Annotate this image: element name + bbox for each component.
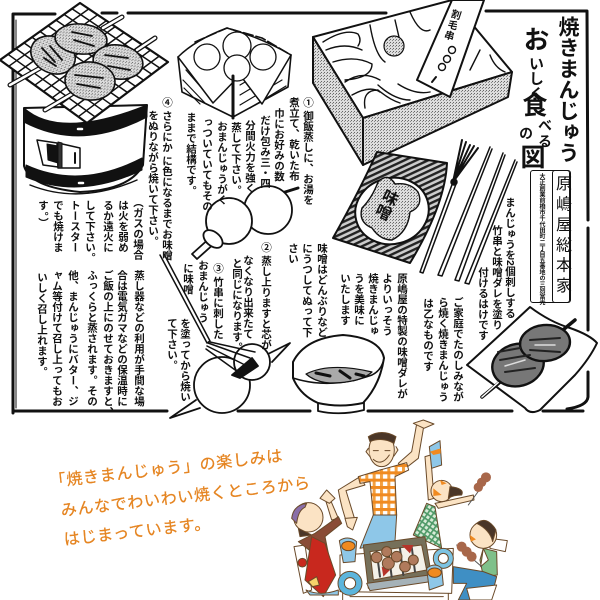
icon: bowl of miso (293, 335, 384, 413)
text: step 1: 巾にお好みの数 (273, 108, 285, 182)
boy on right (453, 520, 507, 600)
title: の (518, 126, 534, 140)
text: special miso sauce: よりいっそう (381, 273, 393, 336)
text: step 1: だけ包み三・四 (259, 115, 271, 188)
text: gas note: でも焼けま (52, 200, 64, 252)
text: gas note: して下さい。 (84, 200, 96, 263)
text: steamer note: 蒸し器などの利用が手間な場 (133, 270, 145, 406)
miso label: 味 (379, 187, 401, 210)
text: skewer and brush: まんじゅうを2個刺しする (504, 197, 516, 318)
text: step 3: て下さい。 (166, 318, 178, 370)
text: steamer note: ふっくらと蒸されます。その (86, 270, 98, 406)
text: special miso sauce: うを美味に (353, 273, 365, 326)
frame border (13, 11, 588, 413)
text: step 3: を塗ってから焼い (179, 318, 191, 402)
icon: box of manju with label (313, 0, 512, 165)
woman on left (292, 490, 342, 597)
icon: miso packet (333, 152, 447, 263)
text: enjoy at home (422, 297, 464, 402)
text: step 3: おまんじゅう (197, 260, 209, 323)
text: step 4: をぬりながら焼いて下さい。 (147, 110, 159, 246)
text: step 3 (166, 260, 224, 402)
text: step 3: に味噌 (182, 263, 194, 294)
text: gas note: トースター (69, 200, 81, 252)
maker stamp: 原嶋屋総本家 (553, 175, 570, 293)
text: special miso sauce: いたします (339, 273, 351, 326)
text: step 1: 分間火力を強く (244, 120, 256, 194)
text: step 1: ① 御飯蒸しに、お湯を (302, 97, 314, 205)
orange message: 「焼きまんじゅう」の楽しみは (49, 448, 284, 491)
text: gas note: す。） (37, 200, 49, 228)
icon: charcoal brazier with grill (0, 3, 168, 194)
text: step 1: ままで結構です。 (185, 112, 197, 196)
text: miso bowl note: 味噌はどんぶりなど (316, 243, 328, 338)
text: enjoy at home: ら焼く焼きまんじゅう (437, 297, 449, 402)
icon: three-ball dango on skewer (192, 186, 298, 259)
title: べる (537, 118, 553, 148)
text: skewer and brush (477, 197, 516, 340)
text: step 4: ④ さらにか に色になるまでお味噌 (161, 97, 173, 260)
orange message: はじまっています。 (63, 516, 212, 549)
text: enjoy at home: ご家庭でたのしみなが (452, 297, 464, 402)
text: step 2 (231, 242, 272, 352)
text: gas note (37, 197, 144, 263)
icon: bamboo skewers and brush (420, 140, 517, 284)
text: step 3: ③ 竹串に刺した (212, 263, 224, 339)
table and grill (338, 537, 453, 600)
maker stamp: 大正創業前橋市千代田町二丁目五番地の三別當光 (538, 173, 544, 305)
text: step 1: 煮立て、乾いた布 (288, 97, 300, 181)
text: steamer note: 合は電気ガマなどの保温時に (116, 270, 128, 406)
title: いしく (527, 56, 544, 101)
orange message: みんなでわいわい焼くところから (60, 475, 312, 520)
icon: plate with grilled skewer (467, 307, 597, 412)
text: special miso sauce: 焼きまんじゅ (367, 273, 379, 336)
text: steamer note: いしく召し上れます。 (36, 272, 48, 377)
text: gas note: るか遠火に (102, 200, 114, 252)
miso label: 噌 (372, 201, 394, 225)
text: gas note: （ガスの場合 (132, 197, 144, 260)
text: step 1: っついていてもその (201, 117, 213, 212)
text: miso bowl note (287, 243, 328, 338)
text: steamer note: ご飯の上にのせておきますと、 (102, 270, 114, 417)
text: step 2: と同じになります。 (231, 258, 243, 352)
title: 焼きまんじゅう (556, 16, 579, 163)
text: step 2: ② 蒸し上りますと芯が (260, 242, 272, 350)
icon: basting brush with dango (160, 254, 290, 418)
text: steamer note (36, 270, 145, 417)
text: steamer note: 他、まんじゅうにバター、ジ (67, 270, 79, 406)
man (338, 420, 434, 548)
text: miso bowl note: にうつしてぬって下 (301, 243, 313, 338)
text: miso bowl note: さい (287, 243, 299, 264)
text: step 2: なくなり出来たて (242, 255, 254, 339)
woman in back (413, 441, 491, 548)
label text on box slip: 割毛串 (441, 6, 463, 42)
text: special miso sauce (339, 273, 408, 399)
text: step 1: おまんじゅうがく (216, 121, 228, 205)
text: skewer and brush: 竹串と味噌ダレを塗り (491, 225, 503, 330)
text: step 1 (185, 97, 314, 212)
maker stamp (530, 170, 571, 303)
title (517, 16, 580, 169)
icon: steamer basket with cloth (178, 28, 291, 118)
text: steamer note: ャム等付けて召し上ってもお (51, 270, 63, 406)
text: step 1: 蒸して下さい。 (230, 122, 242, 196)
text: enjoy at home: は乙なものです (422, 298, 434, 372)
text: step 4 (147, 97, 173, 260)
orange message (49, 448, 312, 549)
title: 図 (517, 144, 545, 169)
title: お (520, 26, 550, 52)
miso label (372, 187, 401, 225)
illustration: family enjoying a grill party (292, 420, 507, 600)
title: 食 (519, 92, 547, 117)
text: skewer and brush: 付けるはけです (477, 267, 489, 340)
text: gas note: は火を弱め (117, 200, 129, 252)
text: special miso sauce: 原嶋屋の特製の味噌ダレが (396, 273, 408, 399)
